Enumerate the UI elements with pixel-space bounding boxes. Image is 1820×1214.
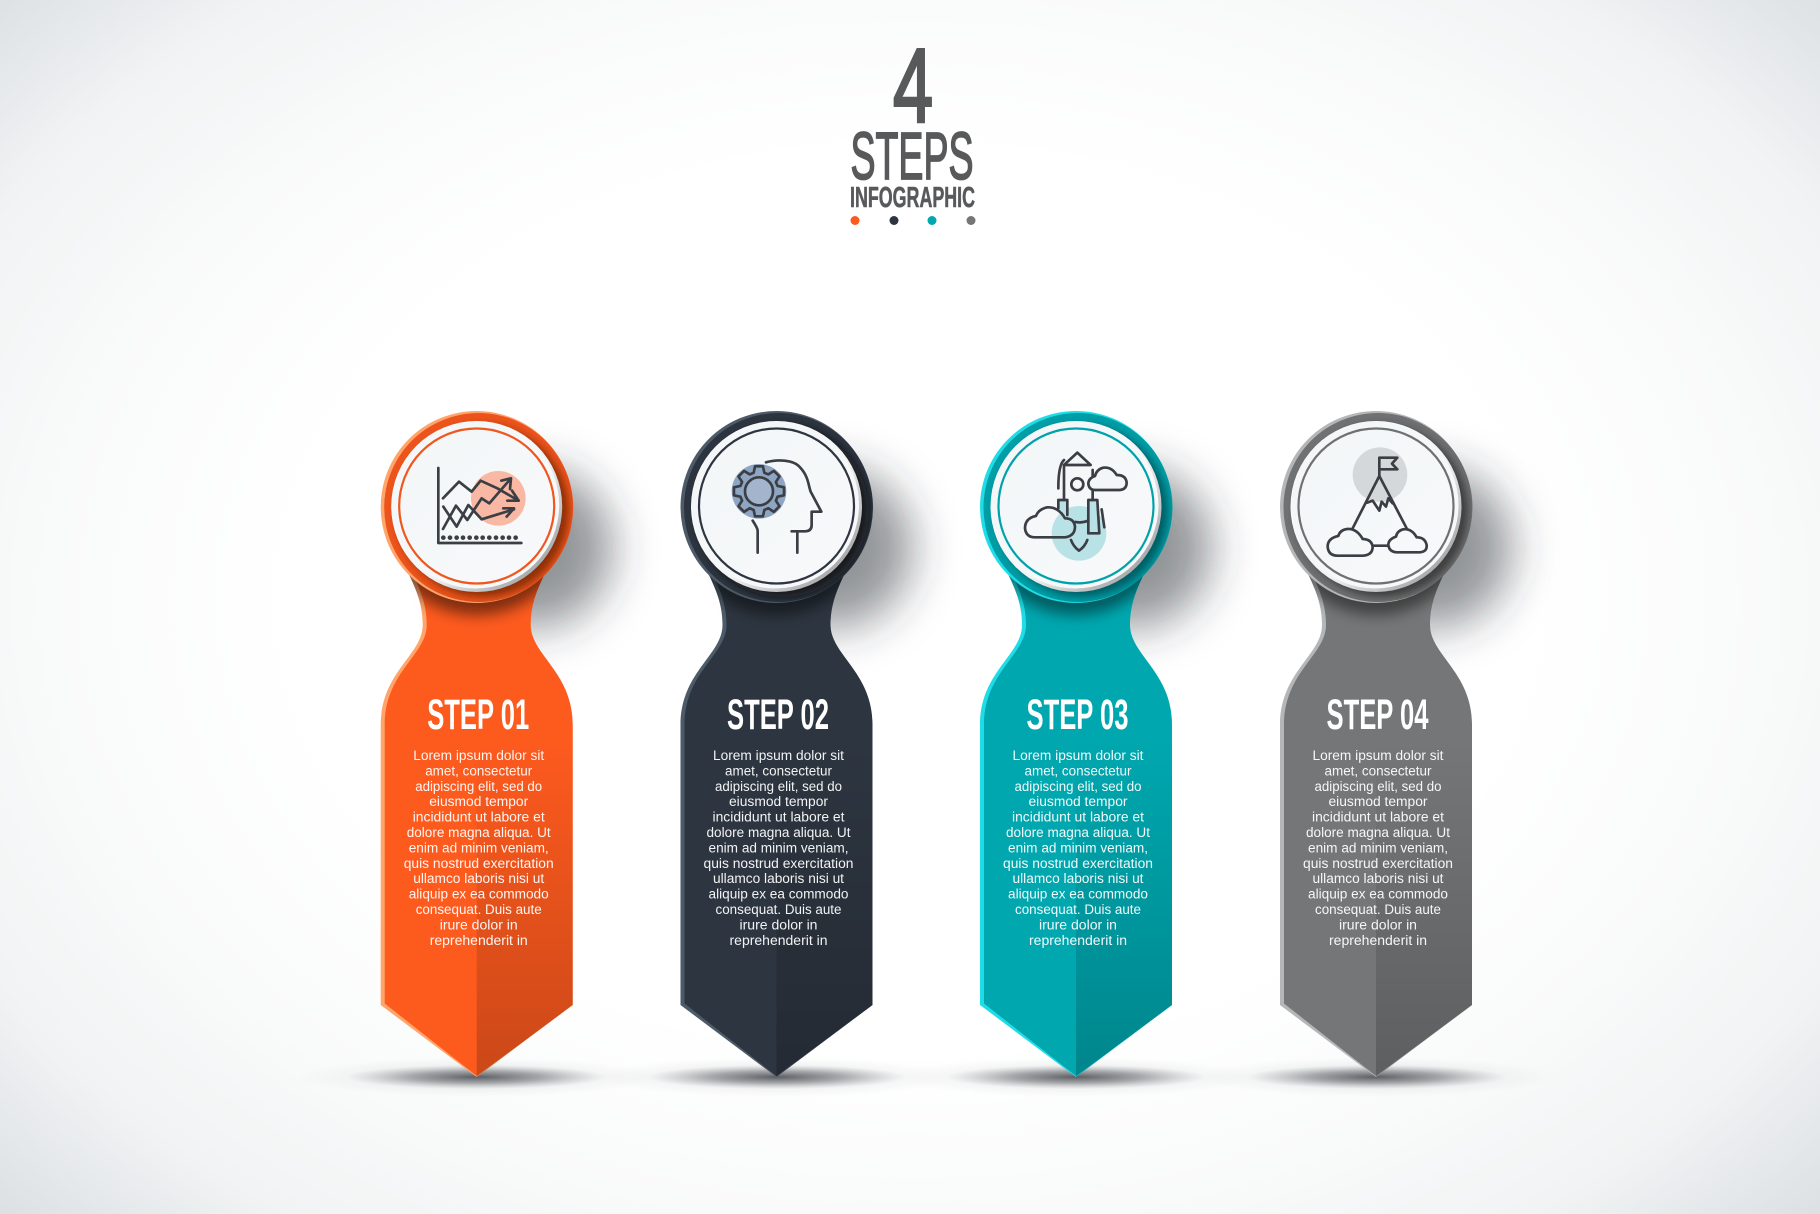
icon: rocket and clouds <box>1025 453 1127 561</box>
icon: head with gear <box>732 460 821 553</box>
step 03 text: Lorem ipsum dolor sit <box>1012 748 1144 763</box>
subtitle: INFOGRAPHIC: INFOGRAPHIC <box>850 182 975 214</box>
step 03 heading: STEP 03 <box>1026 691 1128 739</box>
floor shadow <box>1196 1057 1556 1097</box>
ribbon body <box>380 575 573 1077</box>
circle rim <box>381 411 573 603</box>
white disc <box>1290 421 1462 592</box>
step 03 text: enim ad minim veniam, <box>1008 840 1148 855</box>
floor shadow <box>896 1057 1256 1097</box>
panel: step 02 <box>596 411 956 1097</box>
step 03 text: consequat. Duis aute <box>1015 902 1141 917</box>
step 02 text: reprehenderit in <box>730 933 827 948</box>
step 04 text: amet, consectetur <box>1324 763 1432 778</box>
step 01 text: quis nostrud exercitation <box>404 856 554 871</box>
step 03 text: eiusmod tempor <box>1028 794 1128 809</box>
step 02 text: ullamco laboris nisi ut <box>713 871 844 886</box>
step 01 heading: STEP 01 <box>427 691 529 739</box>
title block <box>850 28 976 225</box>
icon: chart with arrows <box>438 468 526 543</box>
step 02 heading: STEP 02 <box>727 691 829 739</box>
step 04 text: eiusmod tempor <box>1328 794 1428 809</box>
step 02 text: amet, consectetur <box>725 763 832 778</box>
step 02 text <box>704 748 854 948</box>
step 03 text: aliquip ex ea commodo <box>1008 887 1148 902</box>
step 03 text <box>1003 748 1153 948</box>
step 02 text: irure dolor in <box>740 917 818 932</box>
step 01 text: dolore magna aliqua. Ut <box>407 825 551 840</box>
title: STEPS: STEPS <box>850 119 974 194</box>
step 03 text: incididunt ut labore et <box>1012 810 1144 825</box>
panel: step 01 <box>297 411 657 1097</box>
step 02 text: aliquip ex ea commodo <box>708 887 848 902</box>
step 01 text: irure dolor in <box>440 917 518 932</box>
step 04 text: enim ad minim veniam, <box>1308 840 1448 855</box>
step 04 text: reprehenderit in <box>1329 933 1427 948</box>
ribbon body <box>1280 575 1472 1077</box>
step 01 text <box>404 748 554 948</box>
white disc <box>691 421 862 592</box>
step 02 text: dolore magna aliqua. Ut <box>706 825 851 840</box>
step 03 text: adipiscing elit, sed do <box>1014 779 1142 794</box>
circle rim <box>680 411 873 603</box>
icon: mountain with flag and clouds <box>1328 447 1427 556</box>
step 01 text: eiusmod tempor <box>429 794 529 809</box>
step 01 text: reprehenderit in <box>430 933 528 948</box>
step 03 text: irure dolor in <box>1039 917 1117 932</box>
step 01 text: Lorem ipsum dolor sit <box>413 748 544 763</box>
step 03 text: amet, consectetur <box>1024 763 1132 778</box>
step 02 text: Lorem ipsum dolor sit <box>713 748 844 763</box>
circle rim <box>980 411 1172 603</box>
circle rim <box>1280 411 1472 603</box>
step 02 text: eiusmod tempor <box>729 794 829 809</box>
step 01 text: enim ad minim veniam, <box>409 840 549 855</box>
panel: step 04 <box>1247 411 1542 1090</box>
step 04 text: ullamco laboris nisi ut <box>1312 871 1444 886</box>
step 04 text: quis nostrud exercitation <box>1303 856 1453 871</box>
step 01 text: adipiscing elit, sed do <box>415 779 542 794</box>
step 02 text: enim ad minim veniam, <box>709 840 848 855</box>
step 01 text: consequat. Duis aute <box>416 902 542 917</box>
step 01 text: incididunt ut labore et <box>413 810 545 825</box>
colour dots <box>850 216 976 225</box>
white disc <box>391 421 562 592</box>
drop shadow <box>1052 468 1212 628</box>
step 02 text: consequat. Duis aute <box>716 902 842 917</box>
step 03 text: ullamco laboris nisi ut <box>1012 871 1144 886</box>
step 04 text <box>1303 748 1453 948</box>
drop shadow <box>453 468 613 628</box>
step 02 text: quis nostrud exercitation <box>704 856 854 871</box>
step 04 text: incididunt ut labore et <box>1312 810 1444 825</box>
panel: step 03 <box>896 411 1256 1097</box>
step 03 text: dolore magna aliqua. Ut <box>1006 825 1150 840</box>
step 01 text: ullamco laboris nisi ut <box>413 871 544 886</box>
step 03 text: quis nostrud exercitation <box>1003 856 1153 871</box>
step 01 text: aliquip ex ea commodo <box>409 887 549 902</box>
drop shadow <box>752 468 912 628</box>
title: 4: 4 <box>893 28 933 145</box>
step 04 heading: STEP 04 <box>1326 691 1429 739</box>
step 04 text: irure dolor in <box>1339 917 1417 932</box>
step 04 text: consequat. Duis aute <box>1315 902 1441 917</box>
floor shadow <box>596 1057 956 1097</box>
step 02 text: incididunt ut labore et <box>712 810 845 825</box>
step 04 text: aliquip ex ea commodo <box>1308 887 1448 902</box>
step 04 text: Lorem ipsum dolor sit <box>1312 748 1444 763</box>
white disc <box>990 421 1162 592</box>
drop shadow <box>1352 468 1512 628</box>
step 04 text: dolore magna aliqua. Ut <box>1306 825 1450 840</box>
floor shadow <box>297 1057 657 1097</box>
ribbon body <box>980 574 1172 1077</box>
step 02 text: adipiscing elit, sed do <box>715 779 842 794</box>
step 03 text: reprehenderit in <box>1029 933 1127 948</box>
ribbon body <box>680 574 872 1077</box>
step 04 text: adipiscing elit, sed do <box>1314 779 1442 794</box>
step 01 text: amet, consectetur <box>425 763 533 778</box>
